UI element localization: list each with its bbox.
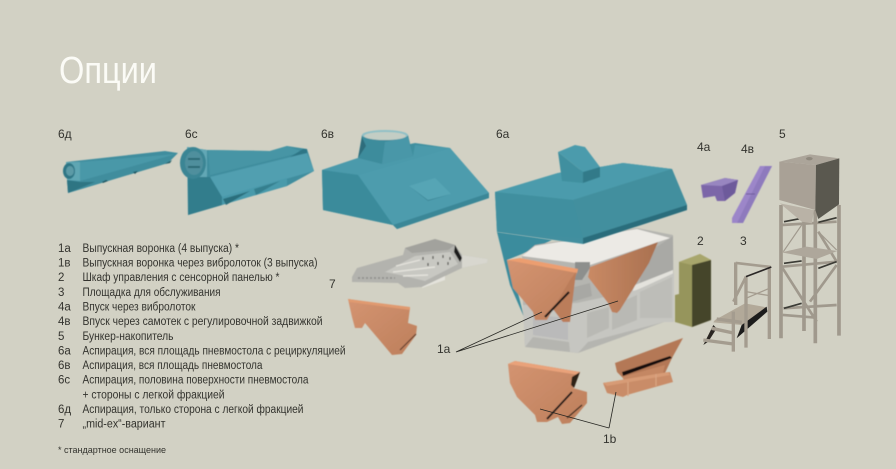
hood 6а — [495, 145, 687, 244]
leader lines 1a — [456, 301, 618, 352]
label: 1a: 1a — [437, 342, 451, 356]
label: 3: 3 — [740, 234, 747, 248]
aspiration 6с — [180, 146, 314, 215]
leader lines 1b — [540, 392, 616, 428]
main machine — [497, 228, 674, 353]
legend: Бункер-накопитель — [82, 331, 174, 343]
legend: 6а — [58, 345, 71, 357]
legend: Аспирация, половина поверхности пневмостола — [82, 375, 309, 387]
label: 6с: 6с — [185, 127, 198, 141]
label: 4в: 4в — [741, 142, 754, 156]
hood lower wedge — [497, 232, 552, 317]
control cabinet 2 — [675, 254, 711, 327]
aspiration 6д — [63, 151, 178, 193]
label: 1b: 1b — [603, 432, 617, 446]
legend: 3 — [58, 287, 64, 299]
legend: Аспирация, только сторона с легкой фракцией — [82, 404, 304, 416]
legend: Впуск через самотек с регулировочной задвижкой — [82, 316, 322, 328]
service platform 3 — [703, 262, 771, 352]
title: Опции — [59, 50, 157, 92]
legend: + стороны с легкой фракцией — [82, 389, 224, 401]
legend: 1в — [58, 258, 71, 270]
legend: 4а — [58, 302, 71, 314]
legend: Выпускная воронка через вибролоток (3 выпуска) — [82, 258, 318, 270]
legend — [58, 243, 346, 431]
label: 6а: 6а — [496, 127, 510, 141]
hopper 1a left — [507, 258, 578, 322]
legend: „mid-ex“-вариант — [82, 419, 166, 431]
label: 2: 2 — [697, 234, 704, 248]
legend: 7 — [58, 419, 64, 431]
label: 5: 5 — [779, 127, 786, 141]
legend: Аспирация, вся площадь пневмостола с рециркуляцией — [82, 345, 346, 357]
hopper 1a right — [588, 242, 658, 313]
inlet 4а — [701, 178, 738, 201]
legend: 6в — [58, 360, 71, 372]
storage hopper 5 — [779, 154, 839, 343]
inlet 4в — [732, 166, 772, 223]
hopper 1b vibrating chute — [603, 338, 683, 397]
aspiration 6в — [322, 130, 489, 229]
label: 4а: 4а — [697, 140, 711, 154]
footnote: * стандартное оснащение — [58, 445, 166, 456]
legend: 6с — [58, 375, 70, 387]
label: 6в: 6в — [321, 127, 334, 141]
legend: 1а — [58, 243, 71, 255]
legend: Площадка для обслуживания — [82, 287, 220, 299]
hopper 1b funnel — [508, 361, 587, 424]
hopper 7 — [348, 299, 417, 355]
label: 6д: 6д — [58, 127, 72, 141]
legend: Аспирация, вся площадь пневмостола — [82, 360, 263, 372]
legend: Выпускная воронка (4 выпуска) * — [82, 243, 239, 255]
legend: Впуск через вибролоток — [82, 302, 196, 314]
mid-ex variant 7 — [352, 239, 488, 288]
legend: 6д — [58, 404, 71, 416]
legend: 5 — [58, 331, 64, 343]
legend: Шкаф управления с сенсорной панелью * — [82, 272, 280, 284]
legend: 2 — [58, 272, 64, 284]
machine body — [522, 228, 674, 353]
label: 7: 7 — [329, 277, 336, 291]
legend: 4в — [58, 316, 71, 328]
